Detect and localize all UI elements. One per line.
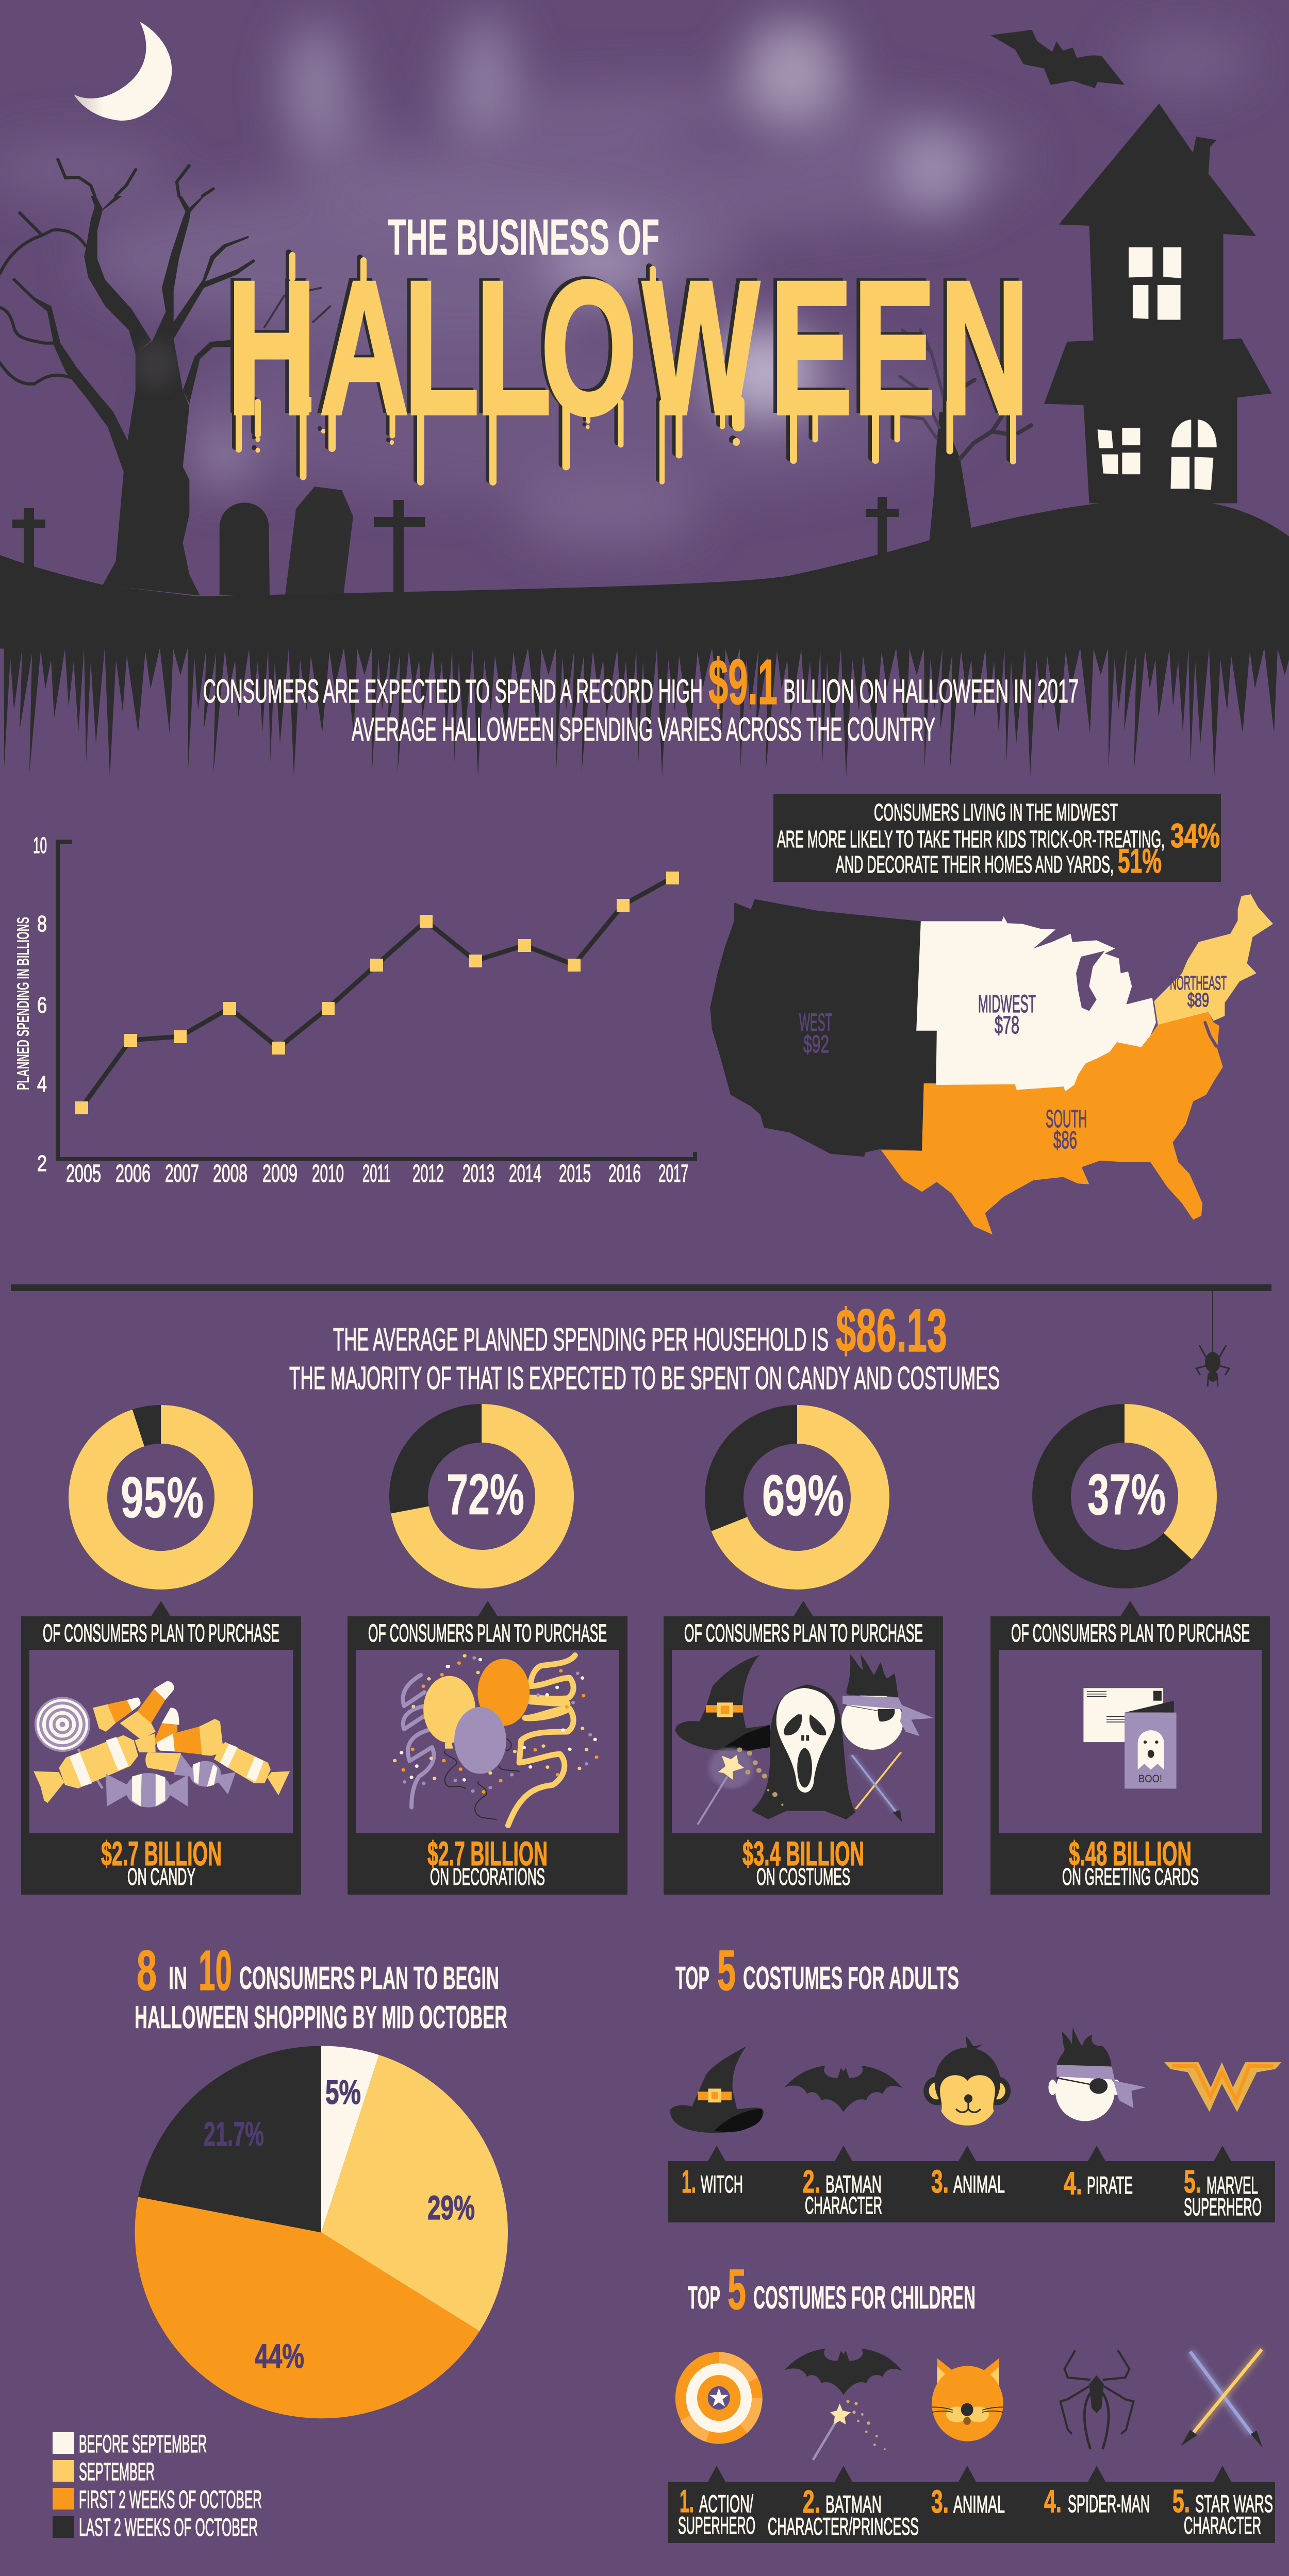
icon: flying bat xyxy=(990,30,1125,88)
card: costumes: $3.4 BILLION xyxy=(742,1834,864,1872)
moon xyxy=(74,22,172,121)
card: decorations: OF CONSUMERS PLAN TO PURCHASE xyxy=(368,1620,607,1647)
label bar: adults: 3. xyxy=(931,2164,949,2200)
icon: balloons and streamers xyxy=(393,1654,599,1826)
icon: witch hat small xyxy=(675,1655,770,1751)
heading: top 5 adults: 5 xyxy=(717,1939,736,2002)
icon: pirate small xyxy=(841,1654,934,1750)
label bar: children: CHARACTER/PRINCESS xyxy=(768,2513,919,2540)
intro text block: CONSUMERS ARE EXPECTED TO SPEND A RECORD HIGH xyxy=(203,673,703,710)
icon: witch hat xyxy=(670,2046,764,2133)
tombstone arch xyxy=(220,503,270,596)
y axis labels xyxy=(33,833,47,1176)
pie chart: shopping timing: 21.7% xyxy=(204,2115,264,2153)
small tree xyxy=(900,330,1031,543)
label bar: adults: ANIMAL xyxy=(953,2170,1005,2198)
heading: average spending: $86.13 xyxy=(836,1297,947,1365)
map: US regions: NORTHEAST xyxy=(1170,973,1227,994)
icon: envelope and card: BOO! xyxy=(1138,1773,1162,1785)
card: costumes: ON COSTUMES xyxy=(756,1863,850,1890)
icon: hanging spider xyxy=(1196,1291,1229,1386)
x axis labels: 2015 xyxy=(559,1160,591,1187)
map: US regions: WEST xyxy=(799,1009,832,1036)
x axis labels: 2010 xyxy=(312,1160,344,1187)
heading: average spending: THE AVERAGE PLANNED SPENDING PER HOUSEHOLD IS xyxy=(333,1322,829,1358)
label: northeast xyxy=(1170,973,1227,1011)
label bar: adults: WITCH xyxy=(701,2170,743,2198)
card: greeting cards xyxy=(990,1601,1270,1895)
label bar: children: 5. xyxy=(1172,2484,1190,2519)
donut: 95%: 95% xyxy=(121,1465,204,1530)
card: decorations: $2.7 BILLION xyxy=(427,1834,548,1872)
intro text block: $9.1 xyxy=(708,647,778,718)
label bar: children xyxy=(668,2466,1275,2543)
pie chart: shopping timing xyxy=(135,2046,508,2418)
icon: shield xyxy=(675,2352,763,2444)
data line xyxy=(81,878,672,1108)
region shapes xyxy=(710,894,1273,1234)
icon: pirate xyxy=(1048,2028,1146,2121)
pie legend xyxy=(53,2431,262,2541)
icon: wonder woman logo xyxy=(1164,2062,1281,2112)
x axis labels: 2006 xyxy=(115,1160,151,1187)
heading: 8 in 10: IN xyxy=(169,1961,187,1996)
x axis labels xyxy=(66,1160,688,1187)
card: costumes xyxy=(664,1601,943,1895)
donut: 69%: 69% xyxy=(762,1463,844,1528)
cross right xyxy=(866,497,899,559)
map: US regions xyxy=(710,894,1273,1234)
label: midwest: $78 xyxy=(995,1012,1019,1039)
callout: midwest: 51% xyxy=(1118,842,1162,880)
callout: midwest xyxy=(773,794,1221,882)
x axis labels: 2014 xyxy=(509,1160,541,1187)
pie chart: shopping timing: 44% xyxy=(255,2337,304,2375)
label: west xyxy=(799,1009,832,1058)
y axis labels: 2 xyxy=(37,1151,47,1176)
map: US regions: SOUTH xyxy=(1046,1106,1087,1133)
icon: sabers small xyxy=(852,1752,902,1822)
label bar: adults: BATMAN xyxy=(825,2170,882,2198)
pie legend: SEPTEMBER xyxy=(79,2458,155,2486)
heading: top 5 children xyxy=(688,2258,976,2321)
y axis labels: 8 xyxy=(37,911,47,936)
heading: average spending xyxy=(289,1297,1000,1396)
y axis labels: 6 xyxy=(37,993,47,1018)
y axis labels: 4 xyxy=(37,1072,47,1097)
heading: 8 in 10: 10 xyxy=(199,1939,232,2002)
axis title: PLANNED SPENDING IN BILLIONS xyxy=(13,917,32,1090)
icon: wand small xyxy=(698,1747,767,1825)
icon: bat logo xyxy=(784,2066,903,2112)
icons row: children xyxy=(675,2349,1263,2460)
card: candy: ON CANDY xyxy=(127,1863,195,1890)
label bar: children: SPIDER-MAN xyxy=(1068,2490,1150,2517)
card: greeting cards: $.48 BILLION xyxy=(1069,1834,1192,1872)
ground and hill xyxy=(0,499,1289,648)
intro text block xyxy=(203,647,1079,748)
axis lines xyxy=(58,842,695,1159)
heading: top 5 children: COSTUMES FOR CHILDREN xyxy=(753,2280,976,2316)
donut: 37%: 37% xyxy=(1087,1462,1166,1527)
icon: spider emblem xyxy=(1061,2350,1133,2449)
label bar: adults: 5. xyxy=(1184,2164,1201,2200)
heading: top 5 children: 5 xyxy=(728,2258,746,2321)
label: midwest xyxy=(978,991,1036,1039)
icon: costume collage xyxy=(675,1654,934,1825)
heading: 8 in 10 xyxy=(135,1939,507,2035)
icon: candy pile xyxy=(34,1681,290,1808)
card: candy: $2.7 BILLION xyxy=(101,1834,222,1872)
icon: envelope and card xyxy=(1083,1688,1177,1788)
label bar: adults: PIRATE xyxy=(1087,2171,1133,2199)
pie legend: LAST 2 WEEKS OF OCTOBER xyxy=(79,2514,258,2541)
label bar: adults: 1. xyxy=(682,2164,696,2200)
x axis labels: 2005 xyxy=(66,1160,101,1187)
label bar: adults: 4. xyxy=(1064,2166,1082,2201)
label bar: adults: 2. xyxy=(803,2164,820,2200)
icon: scream mask xyxy=(752,1684,855,1819)
icon: monkey xyxy=(923,2036,1011,2126)
tombstone tilted xyxy=(285,487,353,595)
title: halloween with drips: HALLOWEEN xyxy=(227,242,1029,454)
label bar: children: ACTION/ xyxy=(699,2490,754,2517)
card: candy: OF CONSUMERS PLAN TO PURCHASE xyxy=(43,1620,279,1647)
label: northeast: $89 xyxy=(1187,990,1209,1011)
label: west: $92 xyxy=(803,1031,829,1058)
pie chart: shopping timing: 29% xyxy=(427,2188,475,2227)
heading: top 5 adults: TOP xyxy=(675,1961,709,1996)
label bar: adults xyxy=(668,2146,1275,2222)
callout: midwest: 34% xyxy=(1170,816,1220,855)
data markers xyxy=(75,872,679,1114)
haunted house xyxy=(1044,104,1272,503)
heading: top 5 adults: COSTUMES FOR ADULTS xyxy=(743,1961,959,1996)
large bare tree xyxy=(0,159,330,596)
heading: top 5 adults xyxy=(675,1939,959,2002)
x axis labels: 2011 xyxy=(362,1160,391,1187)
x axis labels: 2017 xyxy=(658,1160,688,1187)
dripping edge xyxy=(0,598,1289,777)
y axis labels: 10 xyxy=(33,833,47,858)
heading: 8 in 10: HALLOWEEN SHOPPING BY MID OCTOBER xyxy=(135,2000,507,2035)
pie legend: BEFORE SEPTEMBER xyxy=(79,2431,207,2458)
cross left xyxy=(12,508,45,567)
x axis labels: 2016 xyxy=(608,1160,641,1187)
donut: 72% xyxy=(408,1424,555,1569)
donut: 37% xyxy=(1052,1424,1197,1569)
donut: 69% xyxy=(724,1425,870,1570)
misty sky clouds xyxy=(0,15,1253,549)
label bar: children: 1. xyxy=(680,2484,694,2519)
label bar: adults: CHARACTER xyxy=(805,2192,882,2219)
label bar: children: ANIMAL xyxy=(953,2490,1005,2518)
x axis labels: 2013 xyxy=(462,1160,494,1187)
heading: 8 in 10: 8 xyxy=(137,1939,157,2002)
card: decorations xyxy=(348,1601,627,1895)
icons row: adults xyxy=(670,2028,1281,2133)
label bar: children: 2. xyxy=(803,2484,820,2520)
label bar: children: BATMAN xyxy=(825,2490,882,2518)
icon: cat xyxy=(932,2358,1003,2441)
icon: crossed sabers xyxy=(1181,2349,1263,2448)
donut: 72%: 72% xyxy=(447,1462,524,1527)
x axis labels: 2009 xyxy=(262,1160,298,1187)
line chart: planned spending xyxy=(13,833,695,1187)
map: US regions: MIDWEST xyxy=(978,991,1036,1018)
x axis labels: 2008 xyxy=(213,1160,247,1187)
heading: 8 in 10: CONSUMERS PLAN TO BEGIN xyxy=(239,1961,499,1996)
label: south: $86 xyxy=(1053,1127,1077,1154)
donut: 95% xyxy=(88,1425,234,1570)
pie chart: shopping timing: 5% xyxy=(325,2073,361,2111)
card: candy xyxy=(21,1601,301,1895)
cross middle xyxy=(374,500,425,595)
card: decorations: ON DECORATIONS xyxy=(430,1863,545,1890)
x axis labels: 2012 xyxy=(412,1160,444,1187)
label: south xyxy=(1046,1106,1087,1154)
header scene xyxy=(0,15,1289,777)
label bar: children: SUPERHERO xyxy=(678,2512,755,2539)
label bar: children: 3. xyxy=(931,2484,949,2520)
x axis labels: 2007 xyxy=(165,1160,199,1187)
title: the business of: THE BUSINESS OF xyxy=(388,209,659,265)
card: costumes: OF CONSUMERS PLAN TO PURCHASE xyxy=(684,1620,923,1647)
label bar: children: 4. xyxy=(1044,2484,1062,2519)
heading: top 5 children: TOP xyxy=(688,2280,720,2316)
pie legend: FIRST 2 WEEKS OF OCTOBER xyxy=(79,2486,262,2514)
icon: bat and wand xyxy=(784,2349,903,2460)
